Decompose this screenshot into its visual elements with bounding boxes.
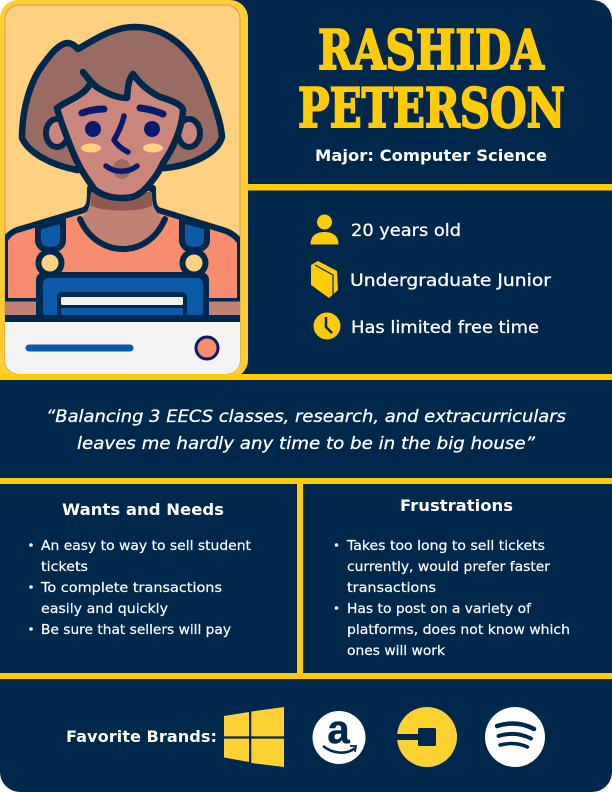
major: Major: Computer Science xyxy=(315,146,547,165)
list: wants: To complete transactions xyxy=(40,581,222,596)
quote xyxy=(46,407,566,454)
list: frustrations: currently, would prefer faster xyxy=(347,560,551,575)
quote: leaves me hardly any time to be in the big house” xyxy=(77,434,535,454)
list: frustrations: transactions xyxy=(347,581,436,596)
hair xyxy=(22,27,222,170)
age: 20 years old xyxy=(351,221,461,241)
nose xyxy=(114,116,128,152)
list: wants: Be sure that sellers will pay xyxy=(41,623,231,638)
list: frustrations: ones will work xyxy=(347,644,446,659)
list: frustrations: platforms, does not know which xyxy=(347,623,570,638)
heading: frustrations: Frustrations xyxy=(400,496,513,515)
title xyxy=(298,18,565,140)
neck and body xyxy=(5,188,240,322)
white base xyxy=(5,322,240,374)
icon: amazon logo: a xyxy=(327,708,350,752)
title: RASHIDA xyxy=(318,18,545,82)
icon: spotify logo xyxy=(485,707,545,767)
eyes xyxy=(85,121,101,137)
quote: “Balancing 3 EECS classes, research, and extracurriculars xyxy=(46,407,566,427)
ears xyxy=(46,119,68,147)
cheeks xyxy=(81,144,101,152)
list: wants: easily and quickly xyxy=(41,602,168,617)
icon: amazon logo xyxy=(312,708,366,764)
list: wants: An easy to way to sell student xyxy=(41,539,251,554)
icon: uber logo xyxy=(396,707,457,767)
icon: clock xyxy=(314,312,340,340)
favorite brands label: Favorite Brands: xyxy=(66,727,217,746)
list: frustrations xyxy=(335,539,570,659)
year: Undergraduate Junior xyxy=(350,271,551,291)
overalls xyxy=(36,272,209,315)
icon: book xyxy=(311,261,338,298)
free time: Has limited free time xyxy=(351,318,539,338)
list: frustrations: Takes too long to sell tickets xyxy=(346,539,545,554)
list: wants: tickets xyxy=(41,560,88,575)
icon: windows logo xyxy=(224,707,284,767)
face xyxy=(60,80,180,195)
panel: wants and needs xyxy=(29,500,251,638)
heading: wants and needs: Wants and Needs xyxy=(62,500,224,519)
eyebrows xyxy=(82,108,163,114)
straps xyxy=(38,220,63,250)
icon: person xyxy=(310,214,338,244)
panel: frustrations xyxy=(335,496,570,659)
sleeves xyxy=(5,302,36,315)
list: frustrations: Has to post on a variety of xyxy=(347,602,531,617)
mouth xyxy=(113,159,131,179)
list: wants xyxy=(29,539,251,638)
yellow divider lines xyxy=(0,184,612,679)
portrait card xyxy=(0,0,248,378)
